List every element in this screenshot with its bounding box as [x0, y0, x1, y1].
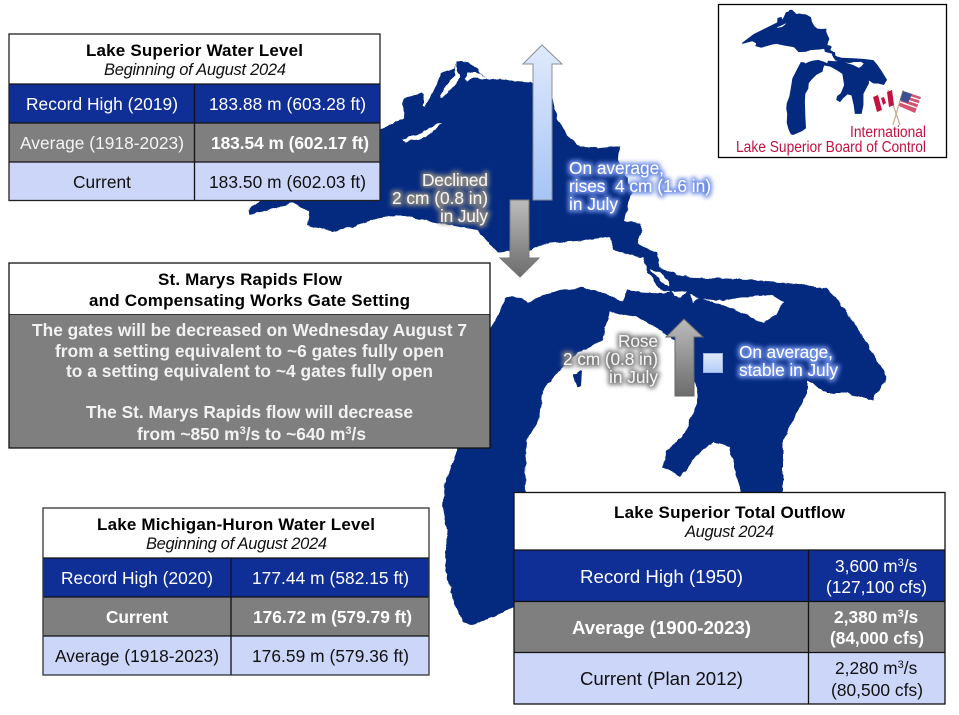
row: record high: 3 — [898, 557, 904, 569]
subheading: Beginning of August 2024 — [146, 535, 327, 553]
heading: gate setting: and Compensating Works Gate Setting — [89, 291, 410, 310]
island: Manitoulin — [703, 296, 784, 323]
callout: Superior average rise: in July — [569, 194, 618, 214]
lake: Superior — [248, 61, 655, 258]
text: gate change — [32, 320, 467, 381]
callout: Superior declined: Declined — [422, 170, 488, 190]
arrow: actual rise on Michigan-Huron — [666, 319, 703, 396]
logo text: International — [850, 124, 926, 141]
heading: gate setting: St. Marys Rapids Flow — [158, 270, 343, 289]
logo map: Great Lakes — [742, 10, 887, 135]
map: Great Lakes — [248, 61, 887, 625]
row: average — [55, 646, 409, 666]
row: record high — [61, 568, 409, 588]
callout: Michigan-Huron average stable: stable in July — [739, 360, 838, 380]
arrow: actual decline on Lake Superior — [500, 200, 539, 277]
row: current: (80,500 cfs) — [831, 680, 923, 700]
text: flow change: 3 — [240, 425, 246, 437]
callout: Superior declined: 2 cm (0.8 in) — [392, 188, 488, 208]
callout: Superior declined — [392, 170, 488, 226]
row: current: 176.72 m (579.79 ft) — [253, 607, 412, 627]
callout: Michigan-Huron rose: 2 cm (0.8 in) — [563, 349, 658, 369]
row: average: 2,380 m — [834, 607, 898, 627]
row: record high: Record High (1950) — [580, 566, 743, 587]
river: St. Marys — [640, 250, 672, 292]
callout: Michigan-Huron rose — [563, 331, 658, 387]
heading: gate setting — [89, 270, 410, 310]
panel: Lake Superior water level — [9, 34, 380, 200]
lakes: Michigan and Huron — [443, 272, 887, 625]
callout: Michigan-Huron rose: in July — [609, 367, 658, 387]
panel: Lake Michigan-Huron water level — [43, 508, 429, 675]
text: flow change — [86, 402, 413, 444]
callout: Michigan-Huron average stable — [739, 342, 838, 380]
heading: Michigan-Huron water level: Lake Michigan-Huron Water Level — [97, 515, 375, 534]
row: average: Average (1900-2023) — [572, 617, 751, 638]
row: current: Current (Plan 2012) — [580, 668, 743, 689]
icon: American flag — [899, 91, 921, 113]
callout: Michigan-Huron rose: Rose — [618, 331, 658, 351]
row: record high: 183.88 m (603.28 ft) — [209, 94, 366, 114]
row: current — [106, 607, 412, 627]
icon: stable average marker — [704, 354, 722, 372]
text: gate change: from a setting equivalent to ~6 gates fully open — [55, 341, 444, 361]
text: flow change: The St. Marys Rapids flow will decrease — [86, 402, 413, 422]
logo text: Lake Superior Board of Control — [736, 139, 926, 156]
panel: Lake Superior total outflow — [514, 492, 945, 704]
row: record high — [26, 94, 366, 114]
heading: Lake Superior water level: Lake Superior Water Level — [86, 41, 303, 60]
arrow: average rise on Lake Superior — [523, 45, 562, 200]
row: record high — [580, 556, 927, 597]
row: record high: Record High (2020) — [61, 568, 213, 588]
row: current: Current — [106, 607, 168, 627]
row: current: 2,280 m — [835, 658, 898, 678]
row: record high: /s — [904, 556, 918, 576]
row: current: /s — [904, 658, 918, 678]
panel: International Lake Superior Board of Control logo — [718, 4, 946, 158]
row: average: 176.59 m (579.36 ft) — [252, 646, 409, 666]
text: gate change: The gates will be decreased on Wednesday August 7 — [32, 320, 467, 340]
logo text — [736, 124, 926, 156]
row: average: (84,000 cfs) — [830, 628, 924, 648]
row: average — [20, 133, 369, 153]
row: record high: 177.44 m (582.15 ft) — [252, 568, 409, 588]
text: flow change: 3 — [345, 425, 352, 437]
row: current — [73, 172, 366, 192]
row: average — [572, 607, 924, 648]
heading: total outflow: Lake Superior Total Outflow — [614, 503, 846, 522]
callout: Superior declined: in July — [440, 206, 488, 226]
panel: St. Marys Rapids flow and gate setting — [9, 263, 490, 448]
row: record high: Record High (2019) — [26, 94, 178, 114]
callout: Superior average rise: rises 4 cm (1.6 in) — [569, 176, 711, 196]
row: average: 3 — [898, 608, 904, 620]
row: record high: (127,100 cfs) — [826, 577, 927, 597]
text: flow change: from ~850 m — [137, 424, 240, 444]
row: current: 3 — [898, 659, 904, 671]
row: average: 183.54 m (602.17 ft) — [211, 133, 369, 153]
callout: Superior average rise: On average, — [569, 158, 664, 178]
text: gate change: to a setting equivalent to ~4 gates fully open — [66, 361, 433, 381]
row: current — [580, 658, 923, 700]
icon: Canadian flag — [873, 90, 894, 112]
text: flow change: /s to ~640 m — [246, 424, 345, 444]
subheading: Beginning of August 2024 — [104, 61, 286, 79]
row: record high: 3,600 m — [835, 556, 898, 576]
icon: crossed flag poles — [888, 90, 903, 125]
callout: Superior average rise — [569, 158, 711, 214]
row: average: Average (1918-2023) — [55, 646, 219, 666]
callout: Michigan-Huron average stable: On average, — [739, 342, 833, 362]
row: current: 183.50 m (602.03 ft) — [209, 172, 366, 192]
text: flow change: /s — [352, 424, 366, 444]
island: Isle Royale — [402, 122, 442, 142]
row: current: Current — [73, 172, 131, 192]
subheading: August 2024 — [684, 523, 774, 541]
row: average: /s — [904, 607, 918, 627]
row: average: Average (1918-2023) — [20, 133, 184, 153]
